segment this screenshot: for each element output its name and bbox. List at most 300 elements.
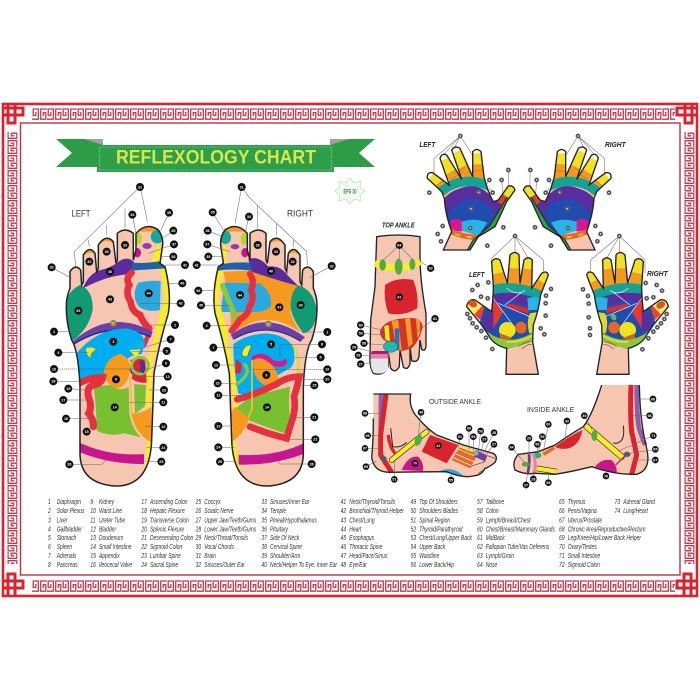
number markers: left foot: 19: [66, 387, 70, 391]
number markers: right foot: 8: [321, 343, 323, 347]
back of left hand: [427, 136, 515, 252]
legend column 9: 69: [559, 535, 565, 542]
markers: outside ankle: 58: [479, 429, 483, 433]
panel: outside ankle: [362, 394, 497, 483]
legend column 9: 65: [559, 499, 565, 506]
legend column 6: 48: [341, 562, 347, 569]
number markers: right foot: 13: [214, 363, 218, 367]
markers: inside ankle: 67: [653, 458, 657, 462]
legend column 7: 53: [411, 535, 417, 542]
number markers: right foot: 43: [277, 306, 281, 310]
palm of left hand: [465, 236, 548, 374]
legend column 9: Uterus/Prostate: [568, 518, 603, 525]
markers: inside ankle: 29: [527, 437, 531, 441]
legend column 9: Leg/Knee/Hip/Lower Back Helper: [568, 535, 642, 542]
thyroid marker: right foot: [265, 321, 272, 327]
legend column 8: 57: [477, 499, 483, 506]
legend column 3: 17: [141, 499, 147, 506]
palm of right hand: [587, 236, 670, 374]
leader lines: left foot: [52, 213, 185, 464]
markers: outside ankle: 65: [364, 465, 368, 469]
legend column 5: Neck/Helper To Eye, Inner Ear: [270, 562, 338, 569]
legend column 7: 54: [411, 544, 417, 551]
number markers: left foot: 41: [183, 263, 187, 267]
thyroid marker: left foot: 52: [111, 322, 115, 326]
number markers: right foot: 36: [206, 229, 210, 233]
legend column 4: 25: [195, 499, 202, 506]
legend column 4: 30: [196, 544, 202, 551]
number markers: left foot: 23: [162, 388, 166, 392]
legend column 10: 73: [615, 499, 621, 506]
number markers: right foot: 9: [265, 373, 267, 377]
number markers: left foot: 33: [105, 250, 109, 254]
number markers: left foot: 9: [115, 378, 117, 382]
legend column 1: 6: [48, 544, 51, 551]
number markers: left foot: 12: [161, 425, 165, 429]
number markers: right foot: 37: [205, 243, 209, 247]
number markers: right foot: 33: [256, 243, 260, 247]
legend column 6: Thoracic Spine: [349, 544, 383, 551]
number markers: left foot: 38: [171, 255, 175, 259]
legend column 6: Heart: [349, 527, 362, 534]
legend column 5: 38: [261, 544, 267, 551]
legend column 2: 13: [90, 535, 96, 542]
foot label: right: RIGHT: [287, 208, 313, 218]
legend column 2: Ureter Tube: [99, 518, 126, 525]
legend column 10: Lung/Heart: [623, 508, 648, 515]
markers: inside ankle: 49: [582, 414, 586, 418]
legend column 4: 29: [195, 535, 202, 542]
markers: inside ankle: 68: [648, 414, 652, 418]
legend column 8: Lymph/Breast/Chest: [486, 518, 531, 525]
number markers: left foot: 34: [130, 213, 135, 217]
markers: inside ankle: 70: [604, 474, 608, 478]
EPS 10 badge: [335, 178, 365, 204]
markers: top ankle: 60: [359, 323, 363, 327]
orange tip on left thumb: [467, 298, 478, 309]
legend column 10: 74: [615, 508, 621, 515]
legend column 2: Ileocecal Valve: [99, 562, 133, 569]
legend column 4: Brain: [204, 553, 216, 560]
number markers: right foot: 25: [218, 460, 222, 464]
legend column 5: [261, 499, 338, 569]
legend column 4: 28: [195, 527, 202, 534]
legend column 1: [47, 499, 85, 569]
number markers: right foot: [193, 183, 336, 468]
markers: outside ankle: 68: [363, 412, 367, 416]
number markers: left foot: 5: [166, 349, 168, 353]
legend column 6: Head/Face/Sinus: [349, 553, 387, 560]
legend column 8: MidBack: [486, 535, 506, 542]
legend column 6: 41: [341, 499, 346, 506]
markers: outside ankle: 67: [363, 447, 367, 451]
legend column 5: Side Of Neck: [270, 535, 300, 542]
legend column 1: 8: [48, 562, 51, 569]
number markers: left foot: 15: [85, 430, 89, 434]
markers: top ankle: [350, 242, 439, 368]
number markers: right foot: 34: [247, 215, 252, 219]
title banner: REFLEXOLOGY CHART: [116, 148, 316, 168]
legend column 1: 4: [48, 527, 51, 534]
heading: TOP ANKLE: [382, 223, 415, 230]
number markers: left foot: 31: [138, 185, 142, 189]
legend column 3: Lumbar Spine: [150, 553, 181, 560]
markers: inside ankle: 65: [653, 448, 657, 452]
legend column 7: 50: [411, 508, 417, 515]
legend column 1: 7: [48, 553, 51, 560]
number markers: left foot: 42: [179, 302, 183, 306]
number markers: left foot: 43: [108, 298, 112, 302]
legend column 9: Penis/Vagina: [568, 508, 597, 515]
number markers: right foot: 1: [326, 330, 328, 334]
legend column 4: Sciatic Nerve: [204, 508, 234, 515]
legend column 6: Bronchial/Thyroid Helper: [349, 508, 405, 515]
legend column 1: Gallbladder: [57, 527, 83, 534]
number markers: right foot: 24: [216, 446, 221, 450]
number markers: right foot: 22: [313, 438, 317, 442]
legend column 5: Cervical Spine: [270, 544, 303, 551]
number markers: left foot: 7: [170, 338, 172, 342]
legend column 5: Temple: [270, 508, 287, 515]
number markers: right foot: 33: [274, 250, 278, 254]
thyroid marker: right foot: 52: [266, 322, 270, 326]
number markers: left foot: 40: [108, 270, 112, 274]
markers: inside ankle: 28: [531, 477, 535, 481]
leader lines: right foot: [197, 212, 332, 464]
markers: inside ankle: 27: [524, 483, 528, 487]
legend column 7: Waistline: [419, 553, 440, 560]
number markers: left foot: 6: [165, 362, 167, 366]
markers: top ankle: 42: [397, 295, 401, 299]
number markers: right foot: 14: [265, 406, 270, 410]
legend column 4: Coccyx: [204, 499, 221, 506]
legend column 4: 26: [195, 508, 202, 515]
number markers: right foot: 46: [196, 289, 200, 293]
legend column 7: 56: [411, 562, 417, 569]
legend column 1: 3: [48, 518, 51, 525]
legend column 3: 23: [141, 553, 147, 560]
legend column 3: [141, 499, 194, 569]
number markers: right foot: 23: [216, 382, 220, 386]
EPS 10 badge: EPS 10: [344, 190, 357, 196]
number markers: right foot: 44: [238, 293, 243, 297]
legend column 1: Pancreas: [57, 562, 78, 569]
legend column 9: Thymus: [568, 499, 585, 506]
legend column 3: 22: [141, 544, 147, 551]
legend column 8: 64: [477, 562, 483, 569]
number markers: left foot: 17: [61, 398, 65, 402]
right palm heading: RIGHT: [647, 271, 668, 278]
legend column 1: Diaphragm: [57, 499, 81, 506]
number markers: left foot: 36: [171, 229, 175, 233]
legend column 3: Sigmoid Colon: [150, 544, 183, 551]
legend column 6: 43: [341, 518, 347, 525]
legend column 2: Small Intestine: [99, 544, 132, 551]
legend column 2: 9: [90, 499, 94, 506]
legend column 1: Solar Plexus: [57, 508, 85, 515]
legend column 3: 18: [141, 508, 147, 515]
number markers: left foot: 24: [161, 446, 166, 450]
markers: outside ankle: 27: [492, 443, 496, 447]
legend column 7: 51: [411, 518, 416, 525]
number markers: left foot: 39: [76, 309, 80, 313]
number markers: right foot: 7: [212, 346, 214, 350]
left hand heading: LEFT: [419, 142, 436, 149]
markers: top ankle: 59: [359, 332, 363, 336]
markers: inside ankle: 42: [565, 419, 569, 423]
legend column 3: Hepatic Flexure: [150, 508, 185, 515]
legend column 5: 36: [261, 527, 267, 534]
legend column 5: Sinuses/Inner Ear: [270, 499, 310, 506]
markers: top ankle: 29: [352, 346, 356, 350]
legend column 2: Kidney: [99, 499, 115, 506]
number markers: right foot: 41: [195, 263, 199, 267]
legend column 2: 14: [90, 544, 96, 551]
legend column 1: 5: [48, 535, 51, 542]
number markers: left foot: 44: [147, 292, 152, 296]
markers: top ankle: 58: [362, 342, 366, 346]
legend column 7: 49: [411, 499, 417, 506]
legend column 7: Upper Back: [419, 544, 446, 551]
number markers: left foot: 2: [174, 323, 176, 327]
number markers: right foot: 35: [211, 211, 215, 215]
legend column 9: 72: [559, 562, 565, 569]
number markers: right foot: 15: [312, 384, 316, 388]
legend column 1: Liver: [57, 518, 68, 525]
markers: inside ankle: 58: [535, 443, 539, 447]
number markers: right foot: 12: [216, 424, 220, 428]
markers: lower hands: [465, 234, 669, 352]
heading: INSIDE ANKLE: [527, 405, 574, 414]
number markers: right foot: 11: [216, 394, 220, 398]
legend column 8: 58: [477, 508, 483, 515]
legend column 1: 1: [48, 499, 51, 506]
number markers: left foot: 32: [50, 266, 54, 270]
markers: outside ankle: 49: [419, 411, 423, 415]
legend column 8: 61: [477, 535, 483, 542]
number markers: left foot: [48, 183, 189, 468]
legend column 7: Spinal Region: [419, 518, 451, 525]
markers: inside ankle: 66: [651, 397, 655, 401]
markers: inside ankle: 71: [651, 434, 655, 438]
panel: lower hands: [465, 234, 670, 374]
legend column 7: 55: [411, 553, 417, 560]
legend column 7: Chest/Lung/Upper Back: [419, 535, 473, 542]
legend column 8: 62: [477, 544, 483, 551]
number markers: right foot: 40: [269, 269, 273, 273]
legend column 3: Ascending Colon: [149, 499, 188, 506]
number markers: left foot: 35: [167, 211, 171, 215]
number markers: left foot: 14: [113, 406, 118, 410]
number markers: left foot: 11: [161, 401, 165, 405]
legend column 8: Nose: [486, 562, 498, 569]
markers: inside ankle: 60: [546, 423, 550, 427]
legend column 4: Sinuses/Outer Ear: [204, 562, 246, 569]
legend column 9: Chronic Area/Reproductive/Rectum: [568, 527, 646, 534]
left palm heading: LEFT: [469, 272, 485, 279]
legend column 9: 71: [559, 553, 565, 560]
legend column 8: Colon: [486, 508, 499, 515]
markers: top ankle: 63: [429, 267, 433, 271]
thyroid marker: left foot: [110, 320, 117, 327]
heading: OUTSIDE ANKLE: [429, 397, 481, 406]
legend column 1: Spleen: [57, 544, 73, 551]
foot label: left: LEFT: [72, 208, 91, 218]
number markers: right foot: 6: [320, 356, 322, 360]
number markers: left foot: 4: [57, 351, 60, 355]
number markers: right foot: 32: [291, 260, 295, 264]
legend column 6: 44: [341, 527, 347, 534]
number markers: right foot: 31: [240, 185, 244, 189]
legend column 7: Top Of Shoulders: [419, 499, 458, 506]
legend column 7: 52: [411, 527, 417, 534]
markers: outside ankle: 42: [436, 444, 440, 448]
markers: outside ankle: 55: [449, 478, 453, 482]
legend column 8: Tailbone: [486, 499, 505, 506]
legend column 2: Waist Line: [99, 508, 123, 515]
right hand heading: RIGHT: [605, 142, 626, 149]
number markers: right foot: 20: [325, 378, 329, 382]
legend column 4: 31: [196, 553, 201, 560]
legend column 7: [411, 499, 473, 569]
legend column 3: 21: [141, 535, 147, 542]
number markers: left foot: 10: [52, 367, 56, 371]
markers: outside ankle: 61: [458, 435, 462, 439]
number markers: left foot: 37: [172, 243, 176, 247]
legend column 9: 70: [559, 544, 565, 551]
legend column 5: 34: [261, 508, 267, 515]
markers: top ankle: 27: [359, 362, 363, 366]
legend column 9: 66: [559, 508, 565, 515]
legend column 3: Splenic Flexure: [150, 527, 185, 534]
number markers: left foot: 32: [87, 260, 91, 264]
legend column 4: 32: [196, 562, 202, 569]
legend column 8: Chest/Breast/Mammary Glands: [486, 527, 555, 534]
legend column 5: 40: [261, 562, 267, 569]
legend column 4: Neck/Throat/Tonsils: [204, 535, 248, 542]
panel: right foot: [193, 183, 336, 486]
legend column 8: 60: [477, 527, 483, 534]
legend column 4: Lower Jaw/Teeth/Gums: [204, 527, 256, 534]
legend column 9: [559, 499, 646, 569]
number markers: right foot: 32: [330, 264, 334, 268]
markers: top hands: [427, 134, 611, 248]
legend column 8: Fallopian Tube/Vas Deferens: [486, 544, 549, 551]
number markers: right foot: 45: [199, 304, 203, 308]
markers: outside ankle: 51: [392, 478, 396, 482]
legend column 1: 2: [47, 508, 51, 515]
number markers: right foot: 39: [299, 303, 303, 307]
legend column 8: Lymph/Groin: [486, 553, 515, 560]
markers: top ankle: 64: [397, 244, 402, 248]
legend column 5: 37: [261, 535, 267, 542]
legend column 4: [195, 499, 256, 569]
legend column 9: Ovary/Testes: [568, 544, 597, 551]
legend column 10: Adrenal Gland: [622, 499, 656, 506]
number markers: left foot: 13: [166, 375, 170, 379]
legend column 6: Chest/Lung: [349, 518, 375, 525]
legend column 3: Transverse Colon: [150, 518, 189, 525]
markers: inside ankle: [508, 396, 659, 488]
number markers: left foot: 25: [159, 460, 163, 464]
legend column 9: 67: [559, 518, 565, 525]
markers: outside ankle: 69: [366, 434, 370, 438]
number markers: right foot: 5: [270, 343, 272, 347]
legend column 2: 10: [90, 508, 96, 515]
legend column 5: Pineal/Hypothalamus: [270, 518, 317, 525]
number markers: left foot: 33: [123, 243, 127, 247]
markers: top ankle: 28: [356, 354, 360, 358]
legend column 2: Bladder: [99, 527, 117, 534]
markers: top ankle: 61: [433, 317, 437, 321]
legend column 9: 68: [559, 527, 565, 534]
legend column 10: [615, 499, 656, 515]
title banner: [56, 139, 375, 172]
legend column 3: Desecending Colon: [150, 535, 194, 542]
legend: [47, 499, 656, 569]
number markers: left foot: 1: [53, 330, 55, 334]
legend column 2: 15: [90, 553, 96, 560]
markers: outside ankle: 28: [492, 431, 496, 435]
number markers: left foot: 46: [180, 282, 184, 286]
legend column 4: Vocal Chords: [204, 544, 234, 551]
markers: outside ankle: [362, 409, 497, 483]
number markers: right foot: 10: [325, 368, 329, 372]
legend column 9: Small Intestine: [568, 553, 601, 560]
legend column 3: Sacral Spine: [150, 562, 179, 569]
legend column 4: 27: [195, 518, 202, 525]
legend column 7: Thyroid/Parathyroid: [419, 527, 463, 534]
legend column 6: Neck/Thyroid/Tonsils: [349, 499, 395, 506]
legend column 5: 35: [261, 518, 267, 525]
legend column 4: Upper Jaw/Teeth/Gums: [204, 518, 256, 525]
legend column 2: Doudenum: [99, 535, 123, 542]
legend column 1: Adrenals: [56, 553, 76, 560]
legend column 3: 19: [141, 518, 147, 525]
number markers: left foot: 18: [51, 380, 55, 384]
markers: inside ankle: 64: [510, 446, 515, 450]
legend column 7: Shoulders Blades: [419, 508, 458, 515]
legend column 3: 24: [141, 562, 147, 569]
number markers: right foot: 38: [206, 255, 210, 259]
panel: top hands: [419, 134, 626, 252]
number markers: right foot: 21: [312, 416, 316, 420]
legend column 5: 33: [261, 499, 267, 506]
number markers: right foot: 26: [310, 462, 314, 466]
markers: outside ankle: 60: [467, 427, 471, 431]
number markers: left foot: 3: [112, 340, 114, 344]
markers: inside ankle: 59: [540, 435, 544, 439]
legend column 3: 20: [141, 527, 147, 534]
legend column 6: Eye/Ear: [349, 562, 368, 569]
markers: outside ankle: 59: [471, 435, 475, 439]
legend column 2: 11: [90, 518, 96, 525]
legend column 8: 59: [477, 518, 483, 525]
markers: outside ankle: 70: [413, 462, 417, 466]
markers: outside ankle: 29: [482, 438, 486, 442]
legend column 2: 12: [90, 527, 96, 534]
back of right hand: [523, 136, 612, 252]
number markers: left foot: 16: [64, 417, 68, 421]
legend column 1: Stomach: [57, 535, 77, 542]
legend column 6: 47: [341, 553, 347, 560]
legend column 6: 42: [341, 508, 347, 515]
orange tip on right thumb: [655, 300, 666, 310]
legend column 5: Pituitary: [270, 527, 289, 534]
legend column 5: 39: [261, 553, 267, 560]
panel: top ankle: [350, 223, 439, 374]
legend column 6: 46: [341, 544, 347, 551]
